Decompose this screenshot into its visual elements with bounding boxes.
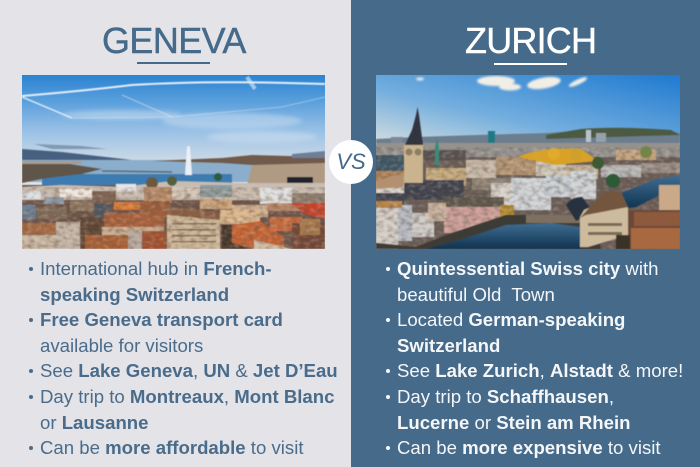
bullet: transport card: [29, 309, 283, 356]
heading: Zurich: ZURICH: [465, 20, 596, 61]
panel: Geneva: [0, 0, 351, 467]
bullet: sights: See Lake Zurich, Alstadt & more!: [397, 360, 683, 381]
bullet: French-speaking hub: International hub in French-: [40, 258, 272, 279]
bullet: French-speaking hub: speaking Switzerland: [40, 284, 229, 305]
heading underline: Geneva: [137, 62, 210, 64]
bullet: day trips: Day trip to Schaffhausen,: [397, 386, 614, 407]
VS badge: VS: [336, 149, 366, 174]
bullet: German-speaking: Located German-speaking: [397, 309, 625, 330]
panel: Zurich: [351, 0, 700, 467]
bullet: transport card: available for visitors: [40, 335, 203, 356]
bullet: Swiss city: [386, 258, 658, 305]
heading: Geneva: GENEVA: [102, 20, 246, 61]
bullet: day trips: or Lausanne: [40, 412, 148, 433]
bullet list: Geneva facts: [29, 258, 338, 458]
bullet: sights: See Lake Geneva, UN & Jet D’Eau: [40, 360, 338, 381]
photo: Zurich old town with river and church tower: [376, 75, 680, 249]
VS badge: [329, 140, 373, 184]
bullet: day trips: Lucerne or Stein am Rhein: [397, 412, 631, 433]
heading underline: Zurich: [494, 63, 567, 65]
bullet: French-speaking hub: [29, 258, 272, 305]
bullet: transport card: Free Geneva transport card: [40, 309, 283, 330]
bullet list: Zurich facts: [386, 258, 683, 458]
bullet: cost: Can be more affordable to visit: [40, 437, 304, 458]
bullet: cost: Can be more expensive to visit: [397, 437, 661, 458]
photo: Geneva skyline with lake and Jet d'Eau: [22, 75, 325, 249]
bullet: Swiss city: Quintessential Swiss city with: [397, 258, 658, 279]
bullet: day trips: [29, 386, 334, 433]
clouds: [416, 75, 588, 91]
bullet: day trips: [386, 386, 631, 433]
bullet: German-speaking: [386, 309, 625, 356]
bullet: German-speaking: Switzerland: [397, 335, 500, 356]
bullet: day trips: Day trip to Montreaux, Mont Blanc: [40, 386, 334, 407]
bullet: Swiss city: beautiful Old Town: [397, 284, 555, 305]
